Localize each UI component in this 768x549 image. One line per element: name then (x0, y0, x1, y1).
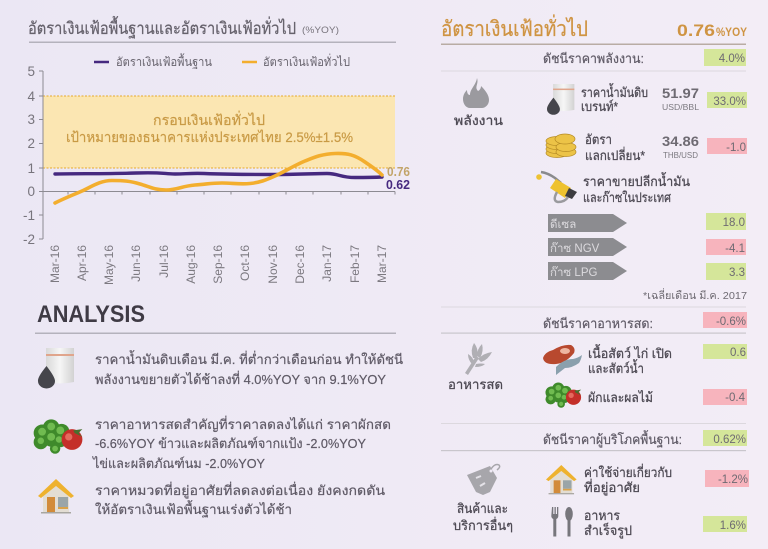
axes (39, 71, 395, 239)
crude oil row: ราคาน้ำมันดิบ (581, 83, 648, 100)
fresh food panel (448, 343, 747, 408)
x axis labels: Mar-17 (375, 245, 389, 283)
vegetable row: ผักและผลไม้ (588, 390, 653, 405)
icon: wheat (465, 343, 492, 375)
y axis labels: 1 (27, 161, 35, 176)
y axis labels: 4 (27, 89, 35, 104)
y axis labels: 0 (27, 184, 35, 199)
y axis labels: 2 (27, 136, 35, 151)
icon: fork and spoon (551, 507, 573, 536)
retail fuel row: ราคาขายปลีกน้ำมัน (583, 172, 690, 189)
y axis labels: 3 (27, 112, 35, 127)
LPG row: 3.3 (729, 267, 745, 279)
prepared food row: สำเร็จรูป (584, 521, 632, 539)
crude oil row: USD/BBL (662, 103, 700, 112)
right heading: %YOY (716, 25, 747, 39)
core CPI index row: ดัชนีราคาผู้บริโภคพื้นฐาน: (543, 430, 682, 448)
fresh food index row (441, 306, 747, 334)
icon: meat and fish (543, 345, 582, 375)
exchange rate row (546, 132, 747, 163)
vegetable row (545, 383, 747, 408)
energy index row (441, 49, 746, 72)
vegetable row: -0.4 (725, 392, 746, 404)
energy index row: 4.0% (719, 53, 745, 65)
target band: เป้าหมายของธนาคารแห่งประเทศไทย 2.5%±1.5% (66, 129, 353, 145)
goods label: สินค้าและ (457, 501, 508, 516)
analysis: energy: ราคาน้ำมันดิบเดือน มี.ค. ที่ต่ำกว่าเดือนก่อน ทำให้ดัชนี (95, 350, 403, 367)
analysis: housing: ราคาหมวดที่อยู่อาศัยที่ลดลงต่อเนื่อง ยังคงกดดัน (95, 482, 385, 499)
value label 0.76: 0.76 (387, 164, 410, 179)
goods label: บริการอื่นๆ (453, 517, 513, 533)
legend: อัตราเงินเฟ้อพื้นฐาน (116, 53, 212, 69)
icon: oil drum (38, 348, 74, 388)
value label 0.62: 0.62 (386, 177, 410, 192)
retail fuel row (536, 172, 690, 205)
LPG row: ก๊าซ LPG (550, 266, 597, 279)
analysis: fresh food: ไข่และผลิตภัณฑ์นม -2.0%YOY (92, 456, 265, 471)
NGV row: ก๊าซ NGV (550, 242, 600, 255)
diesel row: 18.0 (723, 217, 745, 229)
analysis: energy (38, 348, 403, 388)
analysis: fresh food: ราคาอาหารสดสำคัญที่ราคาลดลงได้แก่ ราคาผักสด (95, 416, 391, 432)
target band: กรอบเงินเฟ้อทั่วไป (153, 111, 265, 128)
goods label (453, 501, 513, 533)
meat row: และสัตว์น้ำ (588, 359, 644, 376)
exchange rate row: อัตรา (585, 132, 612, 147)
LPG row (548, 262, 746, 280)
diesel row: ดีเซล (550, 218, 576, 231)
icon: coins (546, 134, 576, 158)
headline inflation line (55, 153, 382, 203)
NGV row (548, 238, 746, 256)
icon: house (38, 479, 74, 514)
energy label: พลังงาน (454, 113, 503, 128)
goods and services panel (453, 464, 749, 539)
legend (94, 53, 350, 69)
diesel row (548, 213, 746, 232)
housing row: ที่อยู่อาศัย (584, 479, 640, 496)
analysis: fresh food: -6.6%YOY ข้าวและผลิตภัณฑ์จากแป้ง -2.0%YOY (95, 436, 366, 451)
icon: flame (463, 78, 489, 108)
y axis labels: -1 (23, 208, 35, 223)
housing row: -1.2% (718, 474, 748, 486)
NGV row: -4.1 (725, 243, 745, 255)
icon: vegetables (34, 419, 82, 454)
x axis labels: Jun-16 (129, 245, 143, 282)
analysis: housing (38, 479, 385, 518)
x axis labels: Apr-16 (75, 245, 89, 281)
energy panel (454, 78, 747, 302)
right heading: อัตราเงินเฟ้อทั่วไป (441, 14, 588, 41)
energy index row: ดัชนีราคาพลังงาน: (543, 51, 644, 66)
prepared food row (551, 507, 747, 539)
meat row: เนื้อสัตว์ ไก่ เปิด (588, 344, 672, 361)
analysis: fresh food (34, 416, 391, 471)
analysis: energy: พลังงานขยายตัวได้ช้าลงที่ 4.0%YOY จาก 9.1%YOY (95, 371, 386, 387)
analysis heading: ANALYSIS (37, 301, 145, 328)
exchange rate row: THB/USD (663, 151, 698, 160)
crude oil row: 33.0% (713, 96, 746, 108)
exchange rate row: -1.0 (726, 142, 746, 154)
x axis labels: Dec-16 (293, 245, 307, 284)
target band (43, 96, 395, 168)
exchange rate row: 34.86 (662, 134, 700, 149)
crude oil row (547, 83, 747, 115)
footnote: *เฉลี่ยเดือน มี.ค. 2017 (643, 288, 747, 302)
y axis labels: -2 (23, 232, 35, 247)
right heading (441, 14, 747, 45)
exchange rate row: แลกเปลี่ยน* (585, 147, 645, 163)
core inflation line (55, 173, 382, 178)
core CPI index row (441, 423, 747, 451)
x axis labels: May-16 (102, 245, 116, 285)
x axis labels: Oct-16 (238, 245, 252, 281)
y axis labels (23, 64, 35, 247)
chart heading (28, 16, 396, 43)
x axis labels: Feb-17 (348, 245, 362, 283)
x axis labels: Nov-16 (266, 245, 280, 284)
x axis labels: Mar-16 (48, 245, 62, 283)
housing row (546, 464, 749, 496)
right heading: 0.76 (677, 21, 715, 40)
chart heading: (%YOY) (302, 25, 339, 36)
x axis labels (48, 245, 389, 285)
line chart (23, 53, 410, 285)
fresh food index row: ดัชนีราคาอาหารสด: (543, 316, 653, 331)
x axis labels: Aug-16 (184, 245, 198, 284)
x axis labels: Jan-17 (320, 245, 334, 282)
crude oil row: 51.97 (662, 86, 699, 101)
x axis labels: Sep-16 (211, 245, 225, 284)
crude oil row: เบรนท์* (581, 99, 618, 114)
meat row (543, 344, 747, 376)
x axis labels: Jul-16 (157, 245, 171, 278)
housing row: ค่าใช้จ่ายเกี่ยวกับ (584, 464, 672, 480)
prepared food row: 1.6% (720, 520, 746, 532)
core CPI index row: 0.62% (713, 434, 746, 446)
fresh food label: อาหารสด (448, 377, 503, 392)
legend: อัตราเงินเฟ้อทั่วไป (263, 53, 350, 69)
icon: fuel nozzle (536, 172, 577, 202)
y axis labels: 5 (27, 64, 35, 79)
icon: price tag (467, 464, 500, 495)
analysis: housing: ให้อัตราเงินเฟ้อพื้นฐานเร่งตัวได้ช้า (95, 500, 292, 518)
fresh food index row: -0.6% (716, 316, 746, 328)
retail fuel row: และก๊าซในประเทศ (583, 190, 672, 205)
prepared food row: อาหาร (584, 508, 620, 523)
meat row: 0.6 (730, 347, 746, 359)
chart heading: อัตราเงินเฟ้อพื้นฐานและอัตราเงินเฟ้อทั่วไป (28, 16, 296, 39)
